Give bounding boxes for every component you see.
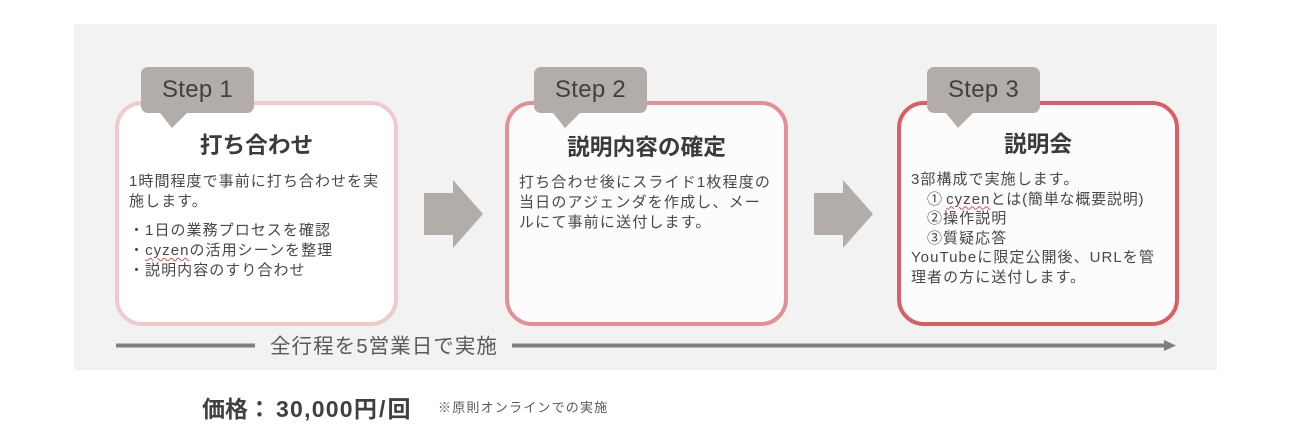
step 3 tab <box>927 67 1040 128</box>
card 3 text: ②操作説明 <box>927 210 1007 227</box>
step 2 tab <box>534 67 647 128</box>
card: step 3 <box>897 67 1179 326</box>
price: 価格：30,000円/回 <box>202 396 410 422</box>
card 1 intro text: 1時間程度で事前に打ち合わせを実 <box>129 173 379 190</box>
card 3 frame <box>897 101 1179 326</box>
timeline arrow <box>116 340 1176 351</box>
card 1 intro text <box>129 173 379 210</box>
step 3 tab: Step 3 <box>948 76 1019 103</box>
step 1 tab <box>141 67 254 128</box>
card: step 1 <box>115 67 398 326</box>
card 2 frame <box>505 101 788 326</box>
card 2 text: 当日のアジェンダを作成し、メー <box>519 194 761 211</box>
card 1 bullet list <box>129 222 333 279</box>
timeline label: 全行程を5営業日で実施 <box>270 335 498 358</box>
card 3 text <box>911 171 1155 286</box>
card 2 text <box>519 174 771 231</box>
card 2 heading: 説明内容の確定 <box>567 134 726 160</box>
card 3 text: 3部構成で実施します。 <box>911 171 1079 188</box>
card 1 heading: 打ち合わせ <box>200 132 313 158</box>
background panel <box>74 24 1217 370</box>
step 1 tab: Step 1 <box>162 76 233 103</box>
arrow: step 2 to step 3 <box>814 180 873 248</box>
card 3 text: ③質疑応答 <box>927 230 1007 247</box>
card 1 bullet list: ・説明内容のすり合わせ <box>129 262 306 279</box>
card 1 bullet list: ・1日の業務プロセスを確認 <box>129 222 331 239</box>
step 2 tab: Step 2 <box>555 76 626 103</box>
card 1 bullet list: ・cyzenの活用シーンを整理 <box>129 242 333 259</box>
card 3 heading: 説明会 <box>1004 131 1072 157</box>
card 3 text: ①cyzenとは(簡単な概要説明) <box>927 191 1144 208</box>
card 3 text: YouTubeに限定公開後、URLを管 <box>911 249 1155 266</box>
card: step 2 <box>505 67 788 326</box>
note: ※原則オンラインでの実施 <box>438 400 608 415</box>
card 1 frame <box>115 101 398 326</box>
card 2 text: ルにて事前に送付します。 <box>519 214 712 231</box>
card 3 text: 理者の方に送付します。 <box>911 269 1086 286</box>
card 2 text: 打ち合わせ後にスライド1枚程度の <box>519 174 771 191</box>
card 1 intro text: 施します。 <box>129 193 208 210</box>
arrow: step 1 to step 2 <box>424 180 483 248</box>
